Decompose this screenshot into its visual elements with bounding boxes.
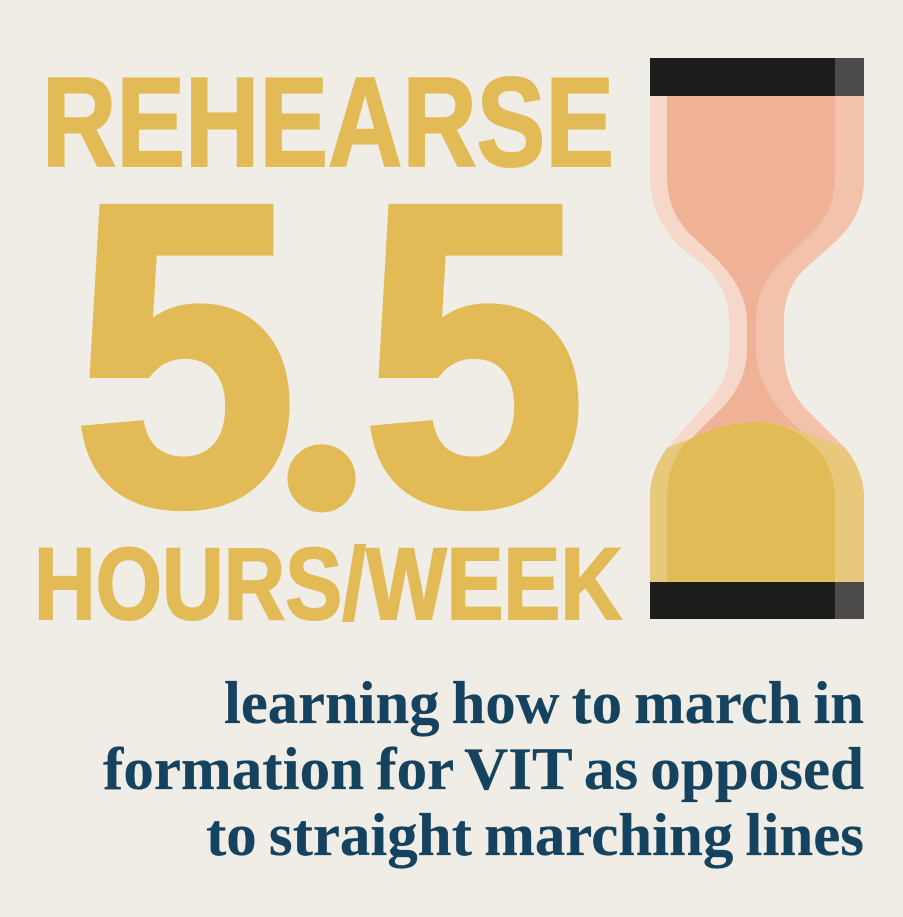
big number: 5.5: 5 <box>73 115 297 594</box>
icon: hourglass <box>650 58 864 619</box>
sand pile left layer <box>650 422 835 582</box>
hourglass glass right layer <box>667 96 864 582</box>
hourglass glass overlap <box>667 96 835 448</box>
big number: 5.5: 5 <box>362 115 586 594</box>
sand pile overlap <box>650 422 835 582</box>
big number: 5.5: . <box>269 132 374 598</box>
sand pile right layer <box>667 422 864 582</box>
bottom cap <box>650 582 864 619</box>
heading: hours per week: HOURS/WEEK <box>34 527 622 641</box>
caption text <box>103 670 864 868</box>
title: rehearse: REHEARSE <box>42 51 614 193</box>
caption text: learning how to march in <box>224 670 864 736</box>
caption text: formation for VIT as opposed <box>103 736 864 802</box>
top cap <box>650 58 864 96</box>
hourglass glass left layer <box>650 96 835 582</box>
big number: 5.5 <box>73 115 586 598</box>
caption text: to straight marching lines <box>206 802 864 868</box>
